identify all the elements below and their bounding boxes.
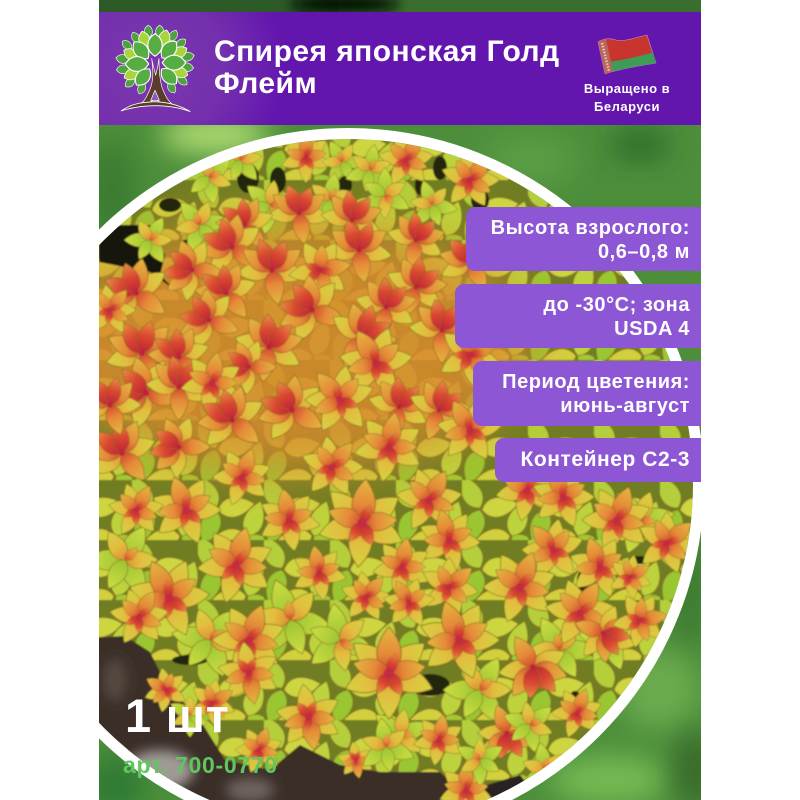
background and plant photo bbox=[99, 0, 701, 800]
top leaves bbox=[123, 140, 500, 264]
panel: hardiness zone: до -30°C; зона bbox=[543, 294, 690, 316]
title: Спирея японская Голд bbox=[214, 35, 560, 68]
header band bbox=[99, 12, 701, 125]
photo: spirea foliage in white-ringed circle bbox=[99, 128, 701, 800]
panel: flowering period: Период цветения: bbox=[502, 371, 690, 393]
article number: арт. 700-0770 bbox=[123, 752, 278, 778]
quantity label: 1 шт bbox=[125, 689, 230, 742]
panel: mature height: 0,6–0,8 м bbox=[598, 241, 690, 263]
title: Флейм bbox=[214, 67, 317, 100]
grown in Belarus caption: Беларуси bbox=[594, 99, 660, 114]
soil and mulch bbox=[90, 225, 540, 800]
grown in Belarus caption: Выращено в bbox=[584, 81, 670, 96]
icon: tree logo bbox=[116, 24, 194, 112]
panel: container size bbox=[495, 438, 701, 482]
panel: hardiness zone: USDA 4 bbox=[614, 318, 690, 340]
panel: mature height bbox=[466, 207, 701, 271]
white ring bbox=[99, 128, 701, 800]
blurred green background bbox=[85, 0, 717, 800]
panel: container size: Контейнер С2-3 bbox=[521, 448, 690, 471]
grown in Belarus caption bbox=[584, 81, 670, 114]
icon: Belarus flag bbox=[598, 34, 656, 74]
lower green-gold leaves bbox=[75, 439, 712, 800]
panel: flowering period bbox=[473, 361, 701, 426]
title bbox=[214, 35, 560, 100]
dark gaps in foliage bbox=[159, 156, 652, 732]
panel: hardiness zone bbox=[455, 284, 701, 348]
panel: flowering period: июнь-август bbox=[560, 395, 690, 417]
panel: mature height: Высота взрослого: bbox=[491, 217, 690, 239]
red upper leaves bbox=[99, 184, 502, 495]
